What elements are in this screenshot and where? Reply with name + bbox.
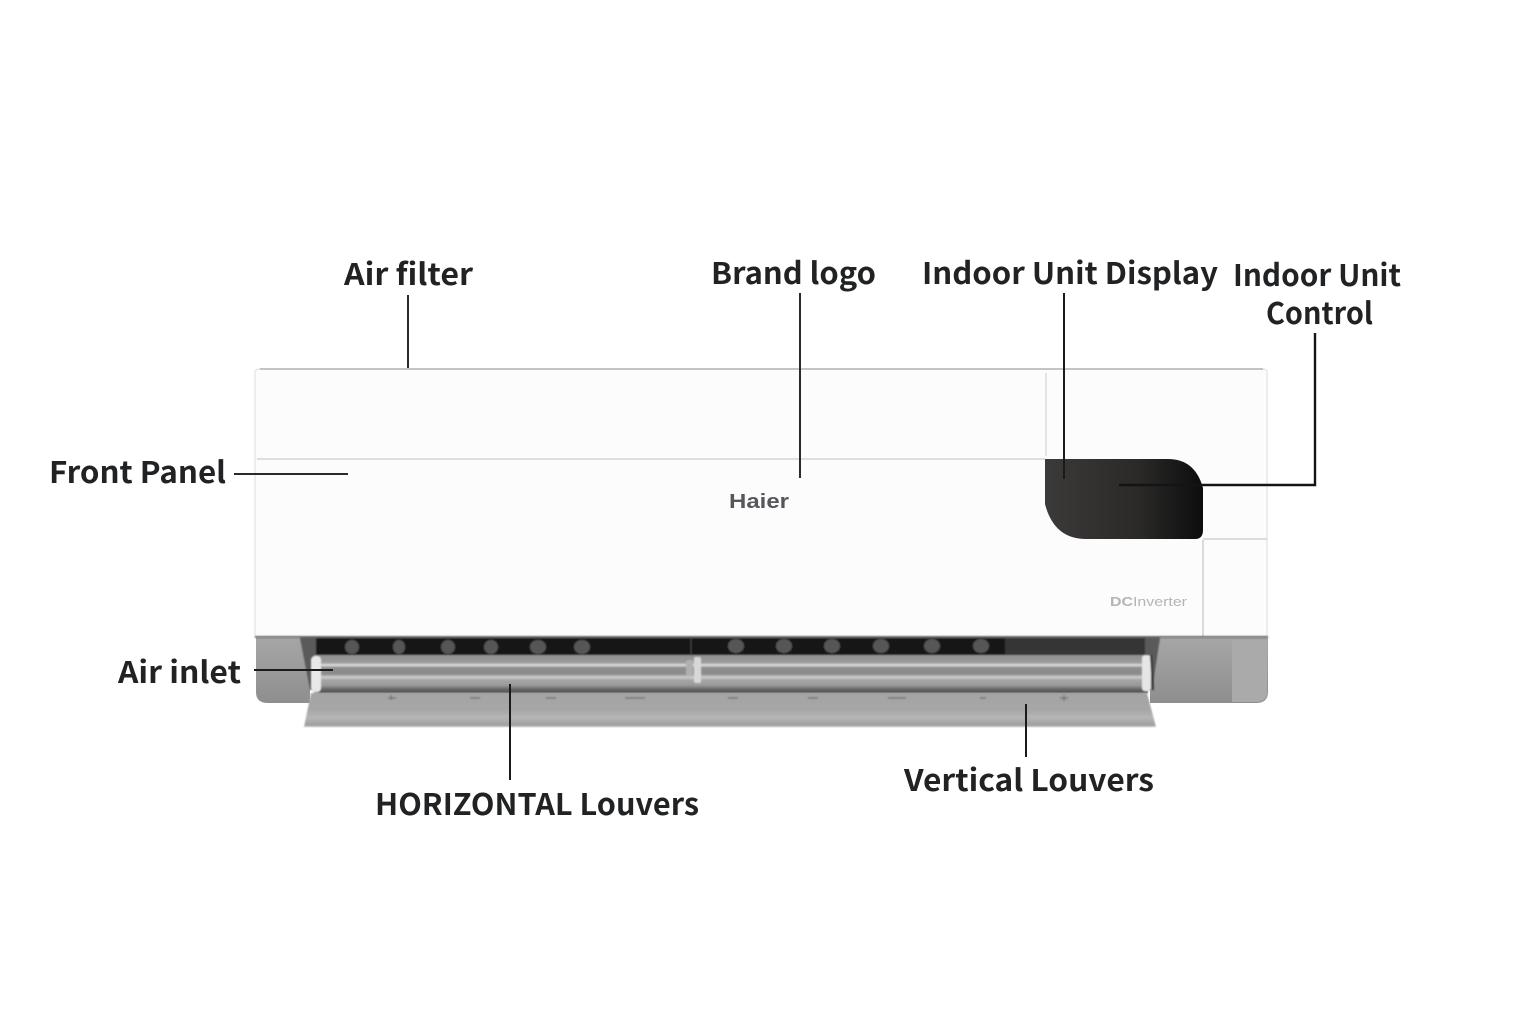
label: Brand logo: Brand logo: [711, 249, 876, 293]
label: Air inlet: Air inlet: [117, 648, 241, 692]
brand logo: Haier: Haier: [729, 491, 789, 513]
label: Indoor Unit Control: Indoor Unit: [1233, 251, 1401, 295]
label: HORIZONTAL Louvers: HORIZONTAL Louvers: [375, 780, 699, 824]
air conditioner indoor unit: [255, 368, 1268, 727]
label: Front Panel: Front Panel: [49, 448, 226, 492]
label: Indoor Unit Display: Indoor Unit Display: [922, 249, 1218, 293]
indoor unit display panel: [1045, 459, 1203, 539]
horizontal louver roller: [311, 638, 1153, 693]
label: Vertical Louvers: Vertical Louvers: [903, 756, 1154, 800]
panel: front panel: [255, 368, 1268, 638]
dark air inlet opening: [255, 636, 1268, 690]
vertical louvers flap: [304, 693, 1156, 727]
DC inverter badge: DC Inverter: [1110, 594, 1188, 609]
label: Air filter: [343, 250, 474, 368]
right end cap: [1150, 638, 1268, 703]
label: Indoor Unit Control: Control: [1266, 289, 1373, 333]
right end cap highlight: [1232, 640, 1267, 702]
label: Indoor Unit Control: [1119, 251, 1401, 485]
left end cap: [256, 638, 310, 703]
label: Air filter: Air filter: [343, 250, 474, 294]
